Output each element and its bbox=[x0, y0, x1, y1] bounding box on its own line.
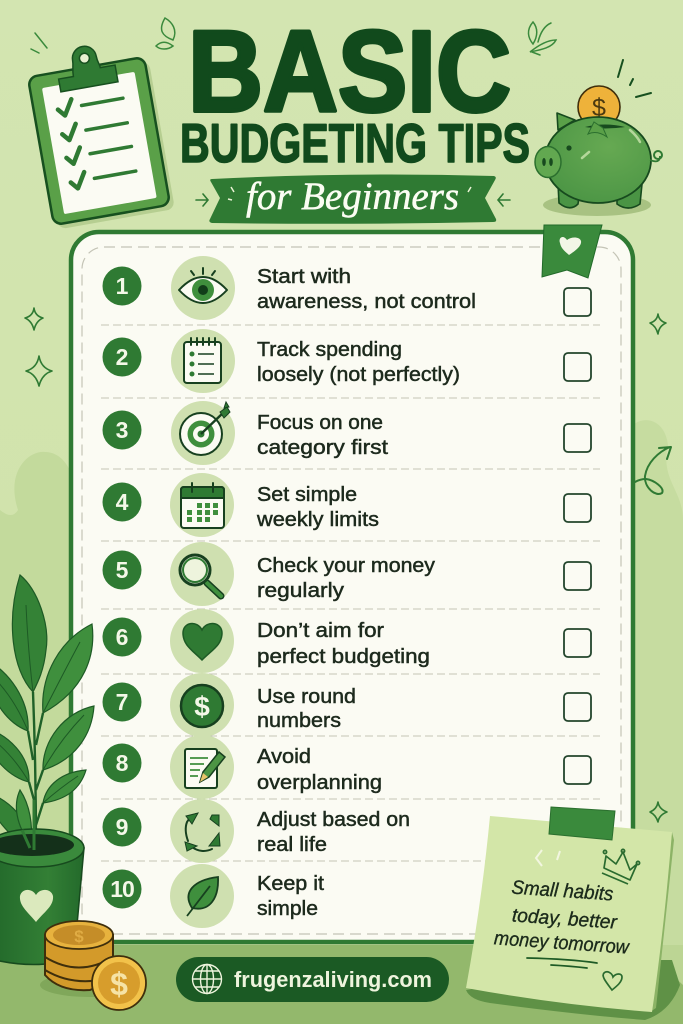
website pill: frugenzaliving.com bbox=[234, 967, 432, 992]
sticky note: today, better bbox=[511, 904, 619, 934]
row 1 bbox=[102, 256, 591, 320]
row 8: Avoid bbox=[257, 745, 311, 768]
row dividers bbox=[101, 325, 600, 861]
row 6: 6 bbox=[116, 624, 128, 650]
row 3: category first bbox=[257, 436, 388, 459]
decorative marks around header bbox=[31, 18, 651, 97]
icon: clipboard bbox=[24, 36, 175, 230]
row 5 bbox=[102, 542, 591, 606]
icon: eye bbox=[171, 256, 235, 320]
coin front bbox=[92, 956, 146, 1010]
sticky note bbox=[466, 807, 680, 1020]
row 7: numbers bbox=[257, 709, 341, 732]
icon: magnifier bbox=[170, 542, 234, 606]
bookmark ribbon bbox=[542, 225, 602, 278]
row 2: 2 bbox=[116, 344, 128, 370]
row 4: weekly limits bbox=[256, 508, 379, 531]
row 2: Track spending bbox=[257, 338, 402, 361]
row 8: 8 bbox=[116, 750, 129, 776]
icon: dollar coin: $ bbox=[194, 691, 210, 722]
row 6: perfect budgeting bbox=[257, 645, 430, 668]
icon: heart bbox=[170, 609, 234, 673]
subtitle banner: for Beginners bbox=[246, 175, 459, 218]
icon: globe bbox=[192, 964, 222, 994]
sticky note: money tomorrow bbox=[493, 927, 631, 959]
row 5: Check your money bbox=[257, 554, 436, 577]
heart doodle bbox=[603, 972, 622, 990]
subtitle banner bbox=[196, 175, 510, 224]
arrow: curly right bbox=[635, 447, 671, 494]
coin stack: $ bbox=[74, 927, 84, 946]
row 8: overplanning bbox=[257, 771, 382, 794]
panel: checklist card bbox=[71, 232, 633, 942]
icon: leaf bbox=[170, 864, 234, 928]
title: BUDGETING TIPS: BUDGETING TIPS bbox=[180, 112, 530, 174]
row 9: 9 bbox=[116, 814, 128, 840]
icon: cycle arrows bbox=[170, 799, 234, 863]
sparkles bbox=[25, 308, 667, 822]
row 7: 7 bbox=[116, 689, 128, 715]
row 7: Use round bbox=[257, 685, 356, 708]
row 10: 10 bbox=[110, 876, 134, 902]
row 2: loosely (not perfectly) bbox=[257, 363, 460, 386]
crown bbox=[602, 849, 640, 884]
checklist ticks bbox=[57, 90, 137, 189]
row 1: 1 bbox=[116, 273, 129, 299]
plant pot bbox=[0, 829, 84, 965]
row 10: Keep it bbox=[257, 872, 324, 895]
icon: notepad bbox=[171, 329, 235, 393]
row 8 bbox=[102, 735, 591, 799]
row 5: 5 bbox=[116, 557, 129, 583]
plant stem front bbox=[22, 800, 34, 850]
coin front: $ bbox=[110, 966, 128, 1002]
tape bbox=[549, 807, 615, 840]
row 3 bbox=[102, 401, 591, 465]
row 6 bbox=[102, 609, 591, 673]
row 4: 4 bbox=[116, 489, 129, 515]
row 10 bbox=[102, 864, 324, 928]
row 9: real life bbox=[257, 833, 327, 856]
icon: note and pencil bbox=[170, 735, 234, 799]
icon: piggy bank bbox=[535, 86, 662, 216]
plant bbox=[0, 575, 94, 850]
icon: target bbox=[171, 401, 235, 465]
row 7 bbox=[102, 673, 591, 737]
row 10: simple bbox=[257, 897, 318, 920]
row 3: Focus on one bbox=[257, 411, 383, 434]
row 9: Adjust based on bbox=[257, 808, 410, 831]
title: BASIC: BASIC bbox=[188, 8, 511, 136]
row 6: Don’t aim for bbox=[257, 619, 384, 642]
row 4: Set simple bbox=[257, 483, 357, 506]
row 3: 3 bbox=[116, 417, 128, 443]
row 2 bbox=[102, 329, 591, 393]
coin: $ bbox=[592, 94, 606, 122]
icon: calendar bbox=[170, 473, 234, 537]
row 4 bbox=[102, 473, 591, 537]
row 5: regularly bbox=[257, 579, 345, 602]
row 1: Start with bbox=[257, 265, 351, 288]
row 1: awareness, not control bbox=[257, 290, 476, 313]
website pill bbox=[176, 957, 449, 1002]
coin stack bbox=[40, 921, 140, 997]
row 9 bbox=[102, 799, 410, 863]
icon: dollar coin bbox=[170, 673, 234, 737]
sticky note: Small habits bbox=[511, 876, 614, 906]
